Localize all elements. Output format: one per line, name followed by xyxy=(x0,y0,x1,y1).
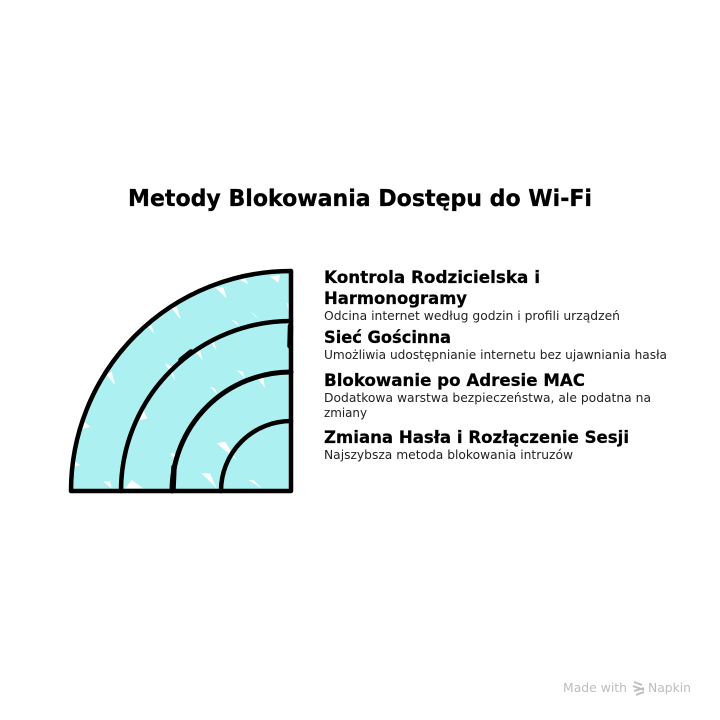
item: Sieć Gościnna: Sieć Gościnna xyxy=(324,328,451,348)
item: Zmiana Hasła i Rozłączenie Sesji: Najszybsza metoda blokowania intruzów xyxy=(324,447,573,462)
item: Blokowanie po Adresie MAC: zmiany xyxy=(324,405,368,420)
item: Kontrola Rodzicielska i Harmonogramy: Odcina internet według godzin i profili urządzeń xyxy=(324,308,620,323)
item: Blokowanie po Adresie MAC: Blokowanie po Adresie MAC xyxy=(324,371,585,391)
item: Sieć Gościnna: Umożliwia udostępnianie internetu bez ujawniania hasła xyxy=(324,347,667,362)
title: Metody Blokowania Dostępu do Wi-Fi xyxy=(128,186,592,212)
footer: Made with Napkin: Napkin xyxy=(648,681,691,695)
chart: quarter-circle concentric layers xyxy=(71,271,291,491)
item: Zmiana Hasła i Rozłączenie Sesji: Zmiana Hasła i Rozłączenie Sesji xyxy=(324,428,629,448)
item: Kontrola Rodzicielska i Harmonogramy xyxy=(324,268,620,323)
footer: Made with Napkin: Made with xyxy=(563,681,627,695)
item: Kontrola Rodzicielska i Harmonogramy: Harmonogramy xyxy=(324,289,467,309)
item: Zmiana Hasła i Rozłączenie Sesji xyxy=(324,428,629,462)
layer outlines xyxy=(71,271,291,491)
item: Sieć Gościnna xyxy=(324,328,667,362)
icon: Napkin logo xyxy=(633,682,644,695)
sketch fill gaps xyxy=(75,275,290,488)
item: Blokowanie po Adresie MAC xyxy=(324,371,651,420)
footer: Made with Napkin xyxy=(563,681,691,695)
item: Kontrola Rodzicielska i Harmonogramy: Kontrola Rodzicielska i xyxy=(324,268,540,288)
item: Blokowanie po Adresie MAC: Dodatkowa warstwa bezpieczeństwa, ale podatna na xyxy=(324,390,651,405)
layer fill xyxy=(71,271,291,491)
